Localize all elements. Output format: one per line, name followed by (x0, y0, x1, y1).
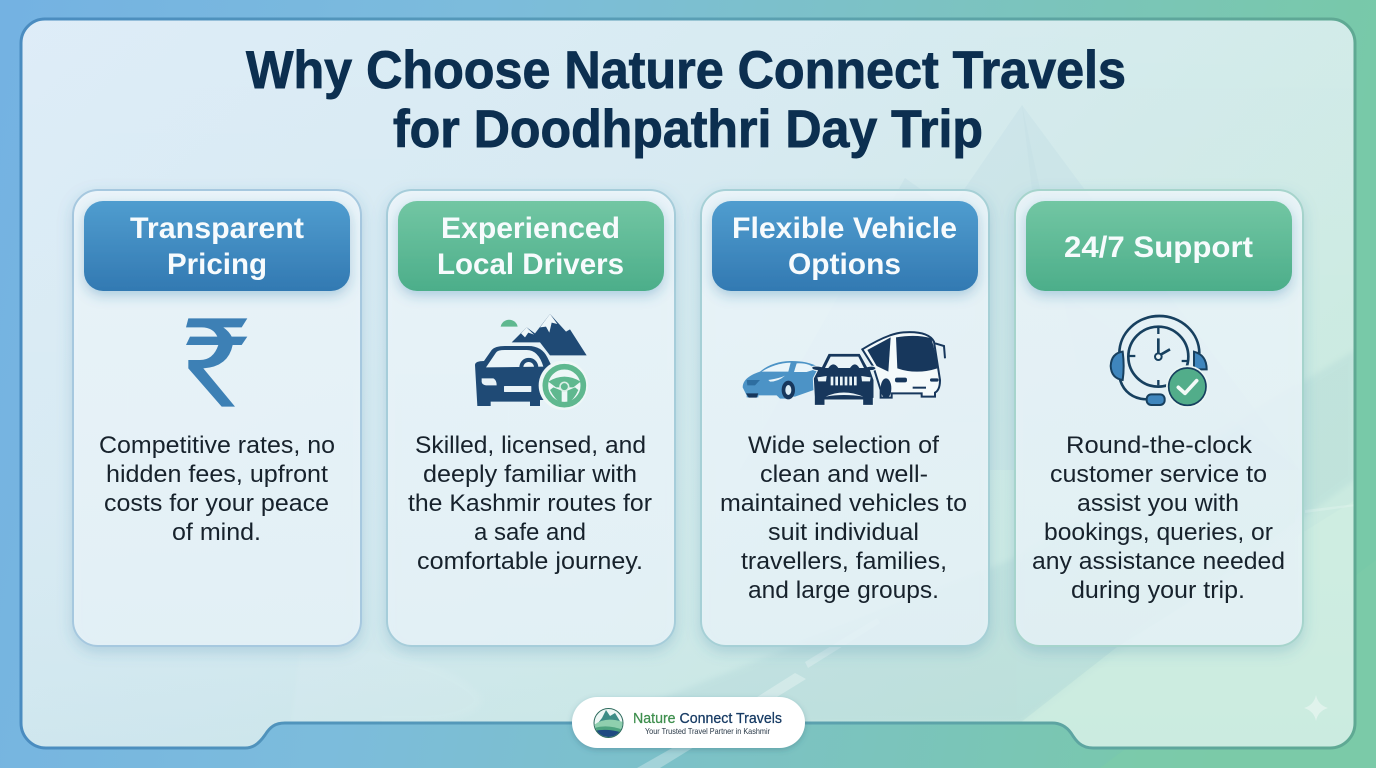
heading: experienced local drivers (398, 201, 664, 291)
icon: clock headset with check (1111, 316, 1209, 408)
heading: flexible vehicle options (712, 201, 978, 291)
heading: flexible vehicle options: Flexible Vehicle (732, 212, 957, 245)
text: transparent pricing: of mind. (172, 519, 261, 546)
heading: transparent pricing: Transparent (130, 212, 304, 245)
text: flexible vehicle options: clean and well- (760, 461, 928, 488)
logo tagline: Your Trusted Travel Partner in Kashmir (645, 726, 770, 736)
text: 24/7 support (1032, 432, 1285, 604)
panel: experienced local drivers (387, 190, 675, 646)
text: flexible vehicle options (720, 432, 967, 604)
heading: transparent pricing: Pricing (167, 248, 267, 281)
heading: experienced local drivers: Experienced (441, 212, 620, 245)
heading: transparent pricing (84, 201, 350, 291)
text: experienced local drivers: a safe and (474, 519, 586, 546)
text: 24/7 support: during your trip. (1071, 577, 1245, 604)
heading: flexible vehicle options: Options (788, 248, 901, 281)
text: flexible vehicle options: travellers, families, (741, 548, 947, 575)
text: experienced local drivers: comfortable journey. (417, 548, 643, 575)
text: transparent pricing: Competitive rates, no (99, 432, 335, 459)
panel: transparent pricing (73, 190, 361, 646)
text: 24/7 support: assist you with (1077, 490, 1239, 517)
text: 24/7 support: Round-the-clock (1066, 432, 1253, 459)
text: transparent pricing: hidden fees, upfront (106, 461, 328, 488)
text: transparent pricing: costs for your peace (104, 490, 329, 517)
title: for Doodhpathri Day Trip (393, 100, 983, 159)
text: flexible vehicle options: maintained vehicles to (720, 490, 967, 517)
text: 24/7 support: customer service to (1050, 461, 1267, 488)
heading: 24/7 support: 24/7 Support (1064, 231, 1253, 264)
title (246, 41, 1126, 159)
panel: flexible vehicle options (701, 190, 989, 646)
text: flexible vehicle options: Wide selection of (748, 432, 939, 459)
text: transparent pricing (99, 432, 335, 546)
text: 24/7 support: bookings, queries, or (1044, 519, 1273, 546)
text: flexible vehicle options: and large groups. (748, 577, 939, 604)
text: experienced local drivers: deeply familiar with (423, 461, 637, 488)
heading: experienced local drivers: Local Drivers (437, 248, 624, 281)
text: 24/7 support: any assistance needed (1032, 548, 1285, 575)
title: Why Choose Nature Connect Travels (246, 41, 1126, 100)
logo name: Nature Connect Travels (633, 710, 782, 727)
text: experienced local drivers (408, 432, 652, 575)
logo badge (572, 697, 805, 748)
icon: car, jeep and bus (743, 332, 945, 405)
icon: car, mountains and steering wheel (475, 314, 588, 410)
text: flexible vehicle options: suit individual (768, 519, 919, 546)
text: experienced local drivers: Skilled, licensed, and (415, 432, 646, 459)
sparkle (1304, 695, 1328, 721)
panel: 24/7 support (1015, 190, 1303, 646)
icon: logo (594, 708, 623, 740)
text: experienced local drivers: the Kashmir routes for (408, 490, 652, 517)
heading: 24/7 support (1026, 201, 1292, 291)
icon: rupee (186, 318, 247, 407)
